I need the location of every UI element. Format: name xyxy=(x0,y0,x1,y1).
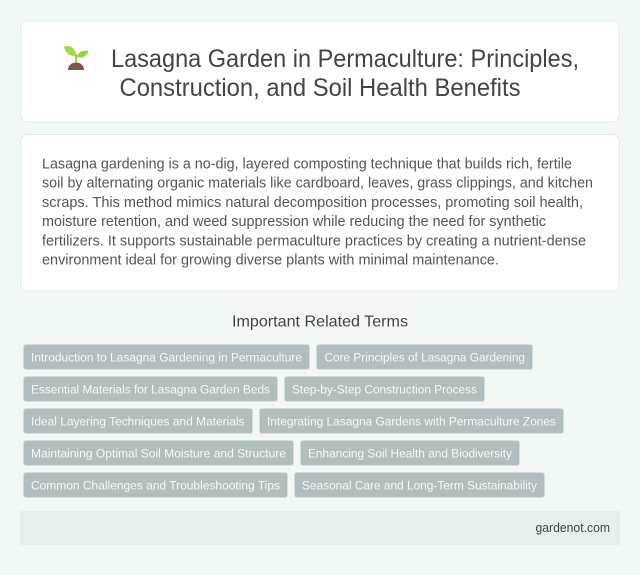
panel: description card xyxy=(20,134,620,292)
description text: moisture retention, and weed suppression while reducing the need for synthetic xyxy=(42,214,546,230)
tag xyxy=(300,440,520,466)
tag: Step-by-Step Construction Process xyxy=(292,382,477,396)
tag: Integrating Lasagna Gardens with Permaculture Zones xyxy=(267,414,556,428)
tag xyxy=(24,344,310,370)
tag xyxy=(260,408,564,434)
footer source text: gardenot.com xyxy=(536,521,610,535)
description text: fertilizers. It supports sustainable permaculture practices by creating a nutrient-dense xyxy=(42,234,586,250)
tag: Ideal Layering Techniques and Materials xyxy=(31,414,244,428)
panel: title card xyxy=(20,20,620,122)
tag: Introduction to Lasagna Gardening in Permaculture xyxy=(31,350,302,364)
tag: Maintaining Optimal Soil Moisture and Structure xyxy=(31,446,286,460)
tag xyxy=(24,408,252,434)
footer bar xyxy=(20,511,620,545)
tag: Seasonal Care and Long-Term Sustainability xyxy=(302,478,538,492)
description text: environment ideal for growing diverse plants with minimal maintenance. xyxy=(42,252,499,268)
title xyxy=(111,45,579,102)
tag: Core Principles of Lasagna Gardening xyxy=(324,350,525,364)
related terms tags xyxy=(24,344,564,498)
heading: related terms: Important Related Terms xyxy=(232,314,408,330)
description text: soil by alternating organic materials like cardboard, leaves, grass clippings, and kitchen xyxy=(42,176,593,192)
tag xyxy=(284,376,484,402)
description text: scraps. This method mimics natural decomposition processes, promoting soil health, xyxy=(42,195,583,211)
tag: Essential Materials for Lasagna Garden Beds xyxy=(31,382,270,396)
tag: Common Challenges and Troubleshooting Tips xyxy=(31,478,280,492)
tag: Enhancing Soil Health and Biodiversity xyxy=(308,446,513,460)
description text: Lasagna gardening is a no-dig, layered composting technique that builds rich, fertile xyxy=(42,156,572,172)
tag xyxy=(294,472,544,498)
description text xyxy=(42,156,593,268)
icon: seedling xyxy=(64,46,88,70)
tag xyxy=(24,376,278,402)
title: Construction, and Soil Health Benefits xyxy=(120,74,520,102)
tag xyxy=(316,344,532,370)
tag xyxy=(24,440,294,466)
title: Lasagna Garden in Permaculture: Principles, xyxy=(111,45,579,73)
tag xyxy=(24,472,288,498)
